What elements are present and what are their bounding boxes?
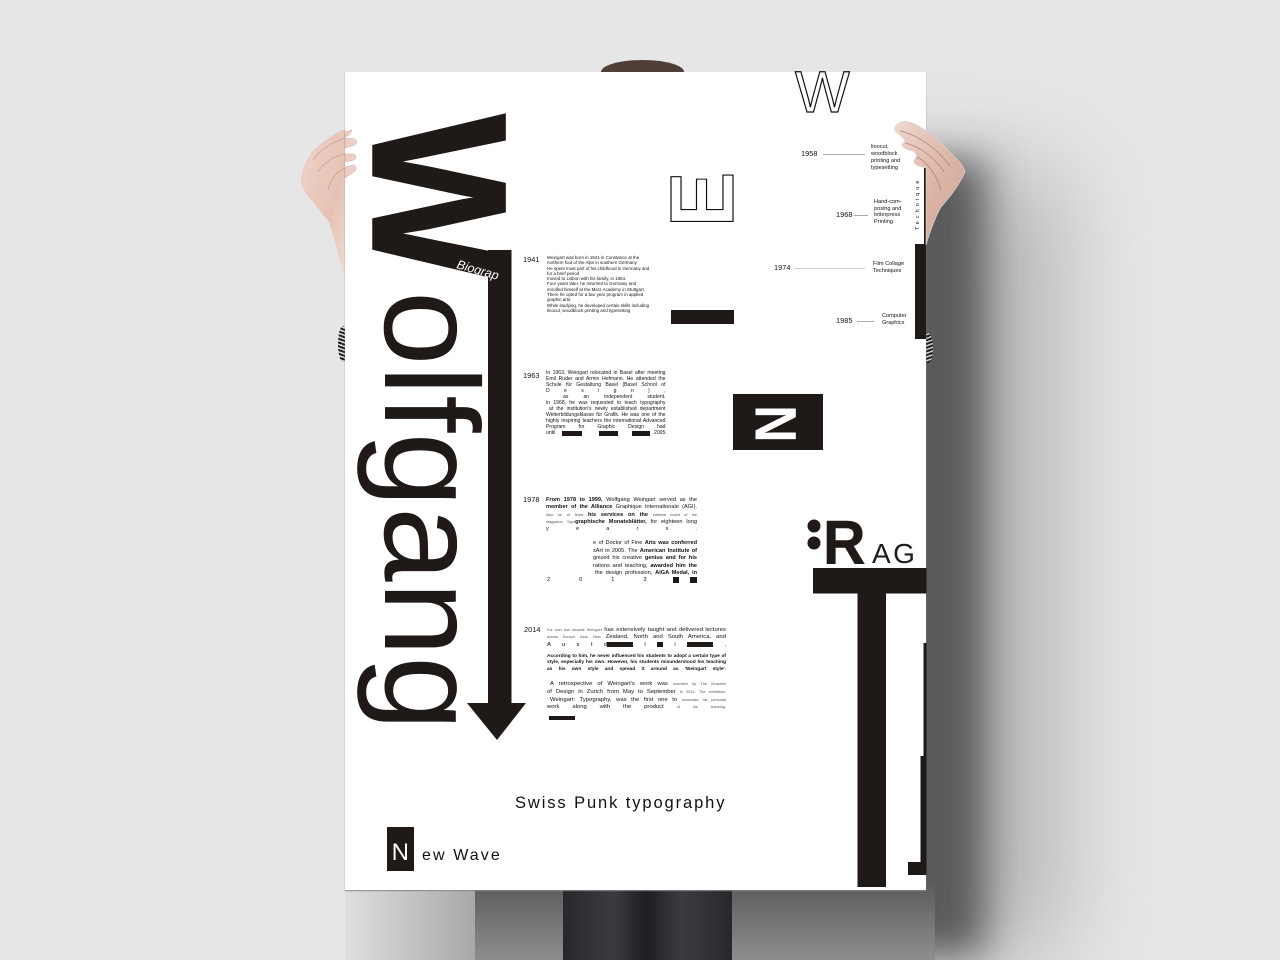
redaction squares <box>673 577 697 583</box>
text block 2014: across Europe, Asia, New Zealand, North and South America, and <box>547 634 726 640</box>
timeline 1968: 1968 <box>836 210 852 219</box>
text block 1963: Emil Ruder and Armin Hofmann. He attended the <box>546 376 666 382</box>
text block 1941: graphic arts. <box>547 297 571 302</box>
text block 1963: 2005. <box>654 430 667 436</box>
timeline 1958: 1958 <box>801 149 817 158</box>
timeline 1985: Graphics <box>882 320 904 326</box>
timeline 1968: Hand-com- <box>874 199 902 205</box>
text block 1941: There he opted for a two year program in applied <box>547 292 643 297</box>
text block 1941: While studying, he developed certain skills including <box>547 303 649 308</box>
text block 1941 <box>547 255 650 313</box>
timeline 1974: Film Collage <box>873 260 904 266</box>
text block 1963: at the institution's newly established department <box>549 406 666 412</box>
text block 1963: Program for Graphic Design had <box>546 424 666 430</box>
text block 1941: Weingart was born in 1941 in Constance at the <box>547 255 639 260</box>
text block 2014: as his own style and spread it around as 'Weingart style'. <box>547 667 726 672</box>
text block 1941: moved to Lisbon with his family, in 1964. <box>547 276 626 281</box>
letter N box <box>387 826 414 870</box>
timeline 1985: 1985 <box>836 316 852 325</box>
biography label: Biograp <box>455 257 500 283</box>
text block 1978: sArt in 2005. The American Institute of <box>593 548 697 554</box>
text block 1978 <box>546 497 697 583</box>
icon: right hand <box>894 120 966 246</box>
timeline 1958: linocut, <box>871 144 889 150</box>
text block 1963: highly inspiring teachers the international Advanced <box>546 418 666 424</box>
year 1941: 1941 <box>523 255 539 264</box>
timeline 1968 <box>836 199 902 225</box>
right sleeve <box>923 333 933 363</box>
new wave label <box>387 827 502 871</box>
year 2014: 2014 <box>524 625 540 634</box>
letter R: R <box>823 508 866 577</box>
text block 2014 <box>547 627 726 720</box>
vertical label Techniques: Technique <box>915 178 921 230</box>
text block 2014: A u s t d l i , <box>547 642 726 648</box>
timeline 1958: printing and <box>871 158 900 164</box>
text block 1941: for a brief period <box>547 271 579 276</box>
colon dots <box>808 520 820 550</box>
title olfgang: olfgang <box>356 291 505 731</box>
timeline 1958: typesetting <box>871 165 898 171</box>
text block 1978: member of the Alliance Graphique Internationale (AGI). <box>546 504 697 510</box>
poster sheet <box>345 72 926 890</box>
text block 2014: A retrospective of Weingart's work was mounted by The Musuem <box>550 681 726 687</box>
new wave label: ew Wave <box>422 847 502 864</box>
text block 1963 <box>546 370 667 436</box>
outline letter E: E <box>653 172 753 227</box>
text block 1978: rations and teaching, awarded him the <box>593 563 697 569</box>
jeans of the person holding the poster <box>563 885 732 960</box>
letter N block <box>733 394 823 450</box>
text block 1963: In 1963, Weingart relocated in Basel after meeting <box>546 370 666 376</box>
text block 1941: northern foot of the Alps in southern Germany. <box>547 260 638 265</box>
text block 1963: D e s i g n ) , <box>546 388 666 394</box>
year 1978: 1978 <box>523 495 539 504</box>
letters AG: AG <box>872 538 917 569</box>
icon: left arm behind poster <box>300 129 345 278</box>
redaction bar <box>549 716 575 720</box>
icon: left hand fingers <box>344 130 357 178</box>
arrow <box>467 250 526 740</box>
text block 2014: work along with the product of his teaching. <box>547 704 726 710</box>
timeline 1985: Computer <box>882 312 907 318</box>
text block 1941: He spent most part of his childhood in Germany and <box>547 266 649 271</box>
letter N box: N <box>392 838 409 866</box>
text block 1978: the design profession, AIGA Medal, in <box>595 570 697 576</box>
text block 1978: From 1978 to 1999, Wolfgang Weingart served as the <box>546 497 697 503</box>
text block 2014: For over four decade Weingart has extensively taught and delivered lectures <box>547 627 726 633</box>
text block 2014: According to him, he never influenced his students to adopt a certain type of <box>547 654 726 659</box>
text block 1963: in 1968, he was requested to teach typography <box>546 400 666 406</box>
text block 1963: Schule für Gestaltung Basel (Basel School of <box>546 382 666 388</box>
text block 2014: Weingart: Typography, was the first one to showcase his personal <box>550 697 726 703</box>
left sleeve <box>338 326 348 362</box>
tagline: Swiss Punk typography <box>515 794 726 812</box>
text block 1963: as an independent student. <box>563 394 666 400</box>
text block 1978: 2 0 1 3 <box>547 577 646 583</box>
timeline 1985 <box>836 312 907 326</box>
timeline 1958: woodblock <box>871 151 897 157</box>
text block 1963: Weiterbildungsklasse für Grafik. He was one of the <box>546 412 666 418</box>
outline letter W: W <box>795 60 850 125</box>
corner bracket <box>908 643 926 875</box>
redaction bars <box>562 431 650 436</box>
timeline 1974 <box>774 260 904 274</box>
text block 1978: y e a r s . <box>546 526 697 532</box>
text block 2014: of Design in Zurich from May to September in 2014. The exhibition, <box>547 689 726 695</box>
timeline 1974: Techniques <box>873 268 901 274</box>
letter N block: N <box>743 405 808 443</box>
text block 1941: enrolled himself at the Merz Academy in Stuttgart. <box>547 287 645 292</box>
title letter W: W <box>331 114 546 281</box>
timeline 1968: posing and <box>874 206 901 212</box>
head of the person holding the poster <box>601 60 684 72</box>
text block 2014: style, especially his own. However, his students misunderstood his teaching <box>547 660 726 665</box>
year 1963: 1963 <box>523 371 539 380</box>
text block 1978: Also he of fered his services on the editorial board of the <box>546 512 697 518</box>
timeline 1968: letterpress <box>874 212 900 218</box>
text block 1978: e of Doctor of Fine Arts was conferred <box>593 540 697 546</box>
timeline 1974: 1974 <box>774 263 790 272</box>
text block 1978: gnized his creative genius and for his <box>593 555 697 561</box>
text block 1941: linocut, woodblock printing and typesetting <box>547 308 630 313</box>
right edge bar <box>915 168 926 339</box>
timeline 1968: Printing <box>874 219 893 225</box>
timeline 1958 <box>801 144 900 171</box>
text block 1978: magazine, Typographische Monatsblätter, for eighteen long <box>546 519 697 525</box>
text block 1963: until <box>546 430 555 436</box>
black bar letter I <box>671 310 734 324</box>
big letter T shape <box>813 568 926 887</box>
text block 1941: Four years later, he returned to Germany and <box>547 281 636 286</box>
